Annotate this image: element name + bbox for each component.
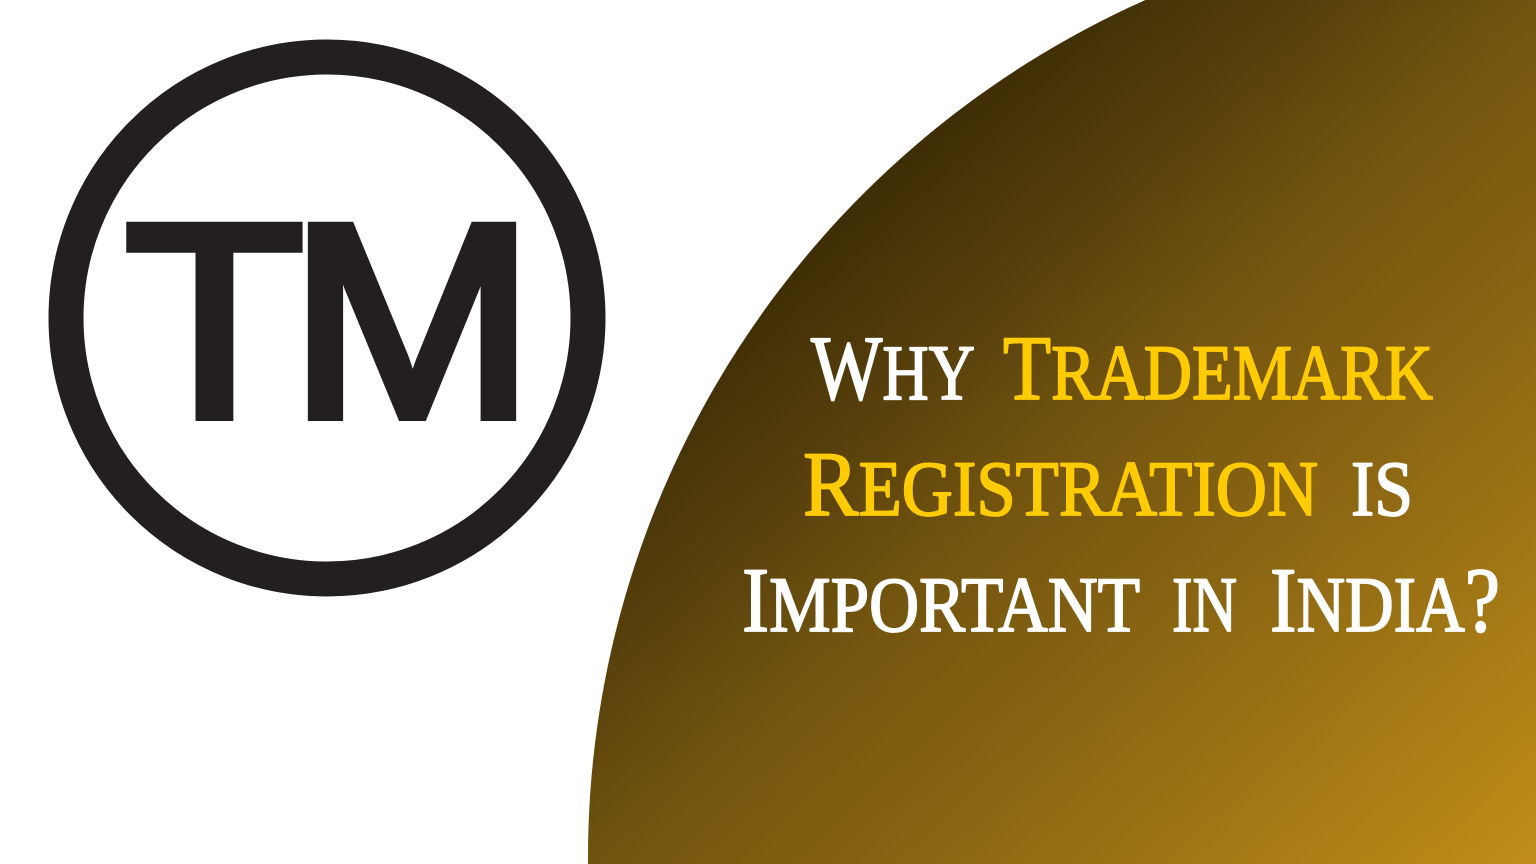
icon letters TM: T [125,168,304,475]
title line 3: INDIA? [1270,549,1500,651]
title line 1: WHY [811,317,975,419]
title line 1 [811,317,1433,419]
title line 3: IN [1172,561,1237,648]
title line 3: IMPORTANT [742,549,1140,651]
title line 1: TRADEMARK [1003,317,1433,419]
title line 2: REGISTRATION [803,433,1318,535]
title line 2: IS [1351,445,1413,532]
icon: trademark symbol [66,57,588,579]
title [742,317,1500,651]
icon letters TM [125,168,535,475]
icon ring [66,57,588,579]
title line 3 [742,549,1500,651]
panel: gradient quarter circle [588,0,1536,864]
icon letters TM: M [289,168,535,475]
